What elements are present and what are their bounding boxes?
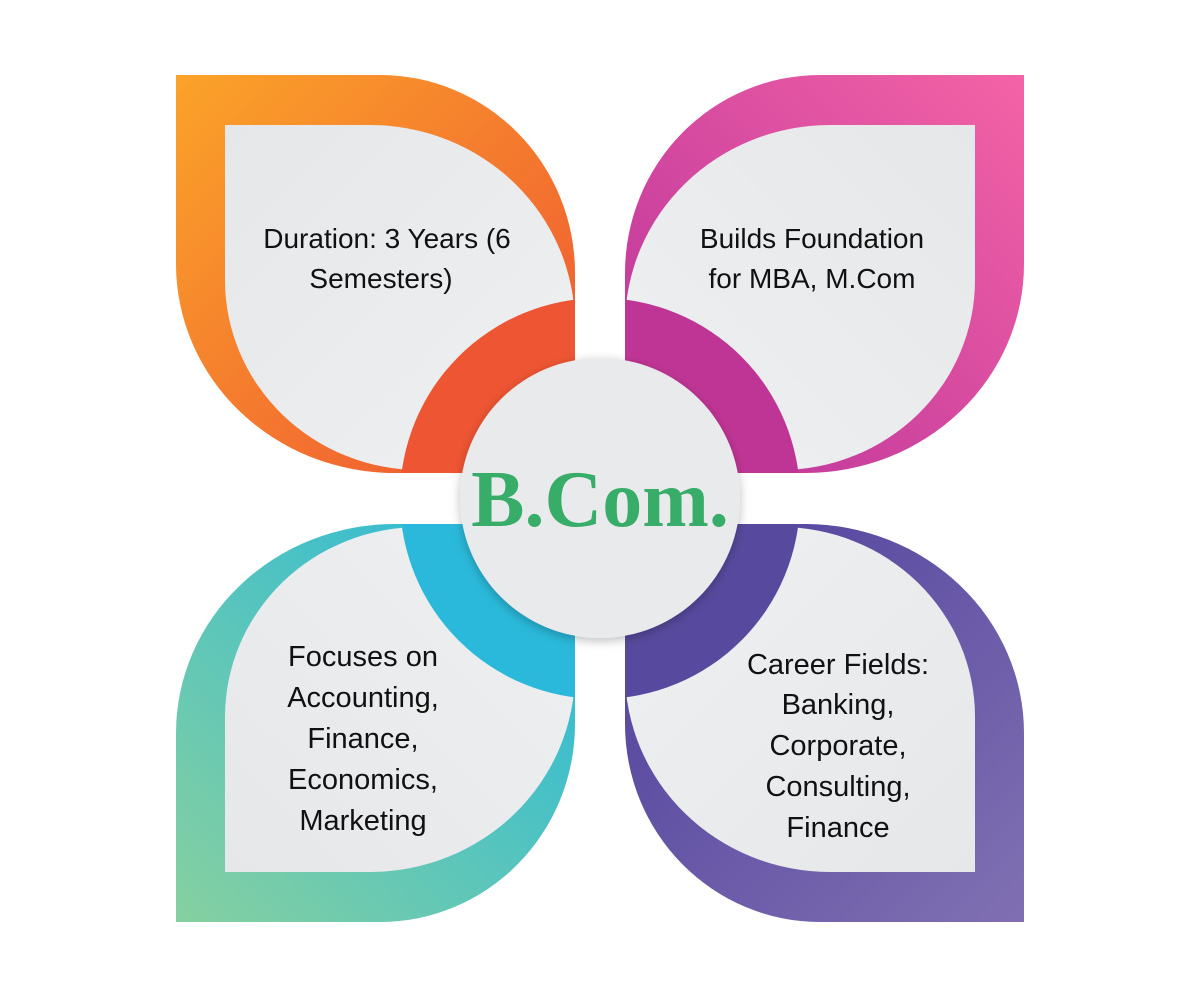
panel: duration [176, 75, 575, 473]
text: focuses [287, 641, 439, 837]
text: careers: Corporate, [769, 730, 907, 762]
panel: careers [625, 524, 1024, 922]
text: foundation: for MBA, M.Com [709, 263, 915, 294]
text: careers: Banking, [782, 689, 894, 721]
center circle [460, 358, 740, 638]
panel: foundation [625, 75, 1024, 473]
text: careers: Finance [786, 812, 890, 844]
panel: focuses [176, 524, 575, 922]
text: careers: Consulting, [765, 771, 911, 803]
text: careers: Career Fields: [747, 649, 929, 681]
title: B.Com.: B.Com. [471, 456, 729, 544]
text: focuses: Marketing [299, 805, 427, 837]
text: duration [263, 223, 511, 294]
text: careers [747, 649, 929, 844]
text: focuses: Accounting, [287, 682, 439, 714]
text: foundation: Builds Foundation [700, 223, 924, 254]
text: focuses: Economics, [288, 764, 438, 796]
text: duration: Semesters) [309, 263, 453, 294]
text: focuses: Focuses on [288, 641, 438, 673]
text: duration: Duration: 3 Years (6 [263, 223, 511, 254]
text: foundation [700, 223, 924, 294]
text: focuses: Finance, [307, 723, 419, 755]
